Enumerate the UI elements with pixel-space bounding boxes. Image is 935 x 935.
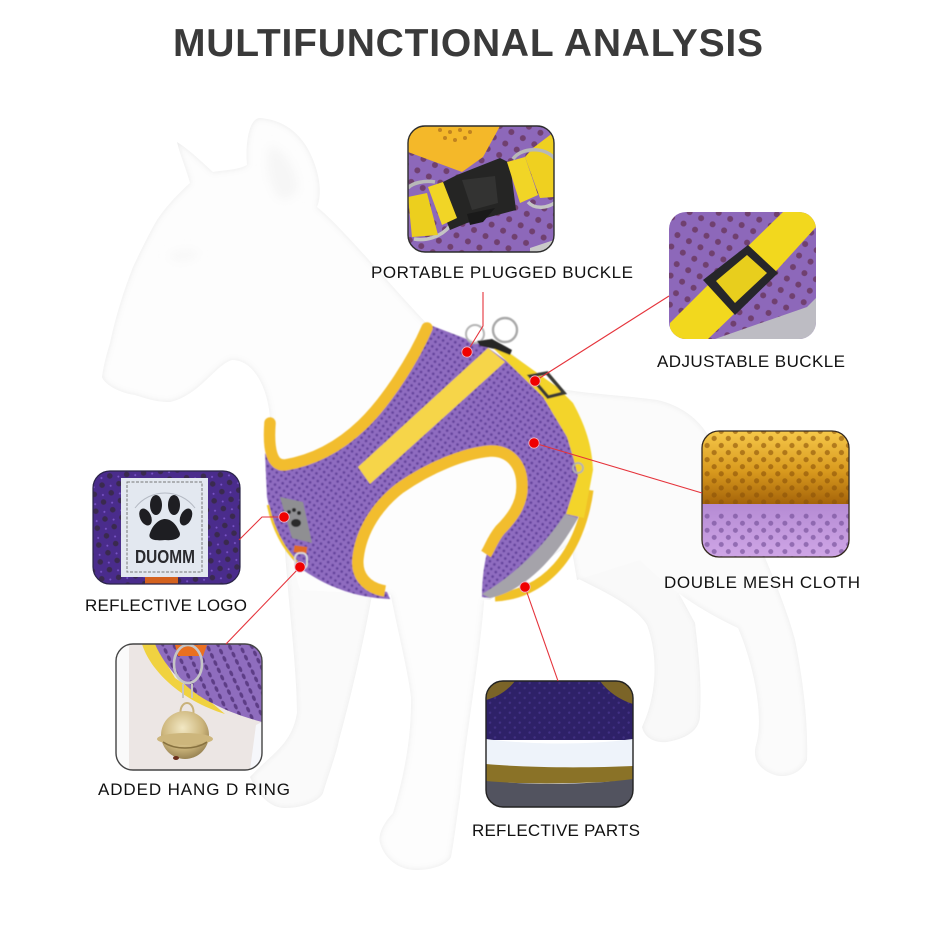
label: double mesh cloth: DOUBLE MESH CLOTH [664,573,860,592]
panel border: plugged buckle [408,126,554,252]
callout: adjustable buckle leader [530,296,669,386]
logo wordmark: DUOMM [135,547,195,567]
panel: hang D ring and bell photo [116,644,262,770]
title: MULTIFUNCTIONAL ANALYSIS [173,22,763,65]
adjuster buckle on strap [530,373,564,397]
label: adjustable buckle: ADJUSTABLE BUCKLE [657,352,845,371]
outer yellow trim [495,490,589,597]
callout: reflective parts leader [520,582,558,681]
neck trim [270,328,427,465]
purple mesh body [265,325,583,599]
panel: reflective logo photo [93,471,240,585]
back strap [490,345,593,518]
callout: reflective logo leader [239,512,289,540]
near hind leg [560,390,807,776]
label: reflective parts: REFLECTIVE PARTS [472,821,640,840]
callout: hang ring leader [226,562,305,644]
chest strap [358,348,505,484]
icon: paw print [137,495,195,540]
reflective strip [482,514,578,598]
panel: portable plugged buckle photo [408,126,556,252]
panel border: hang D ring [116,644,262,770]
side ring [573,463,583,473]
callout: double mesh leader [529,438,702,493]
panel: double mesh cloth photo [702,431,849,557]
reflective logo patch [280,497,312,543]
label: portable plugged buckle: PORTABLE PLUGGED BUCKLE [371,263,633,282]
far front leg [250,550,372,808]
orange tab and hanging ring [294,545,307,569]
label: added hang D ring: ADDED HANG D RING [98,780,290,799]
panel border: reflective parts [486,681,633,807]
panel border: reflective logo [93,471,240,584]
ear and eye shading [168,145,298,260]
callout: plugged buckle leader [462,292,483,357]
panel: reflective parts photo [486,681,633,807]
panel border: double mesh cloth [702,431,849,557]
top buckle and D rings [466,318,517,355]
harness [265,318,593,599]
label: reflective logo: REFLECTIVE LOGO [85,596,247,615]
panel: adjustable buckle photo [669,212,816,339]
head, neck and torso [102,118,590,600]
near front leg [380,580,485,870]
yellow edge below logo [268,505,297,562]
leg opening trim [358,451,522,591]
white dog mannequin [102,118,807,870]
far hind leg [577,540,701,742]
